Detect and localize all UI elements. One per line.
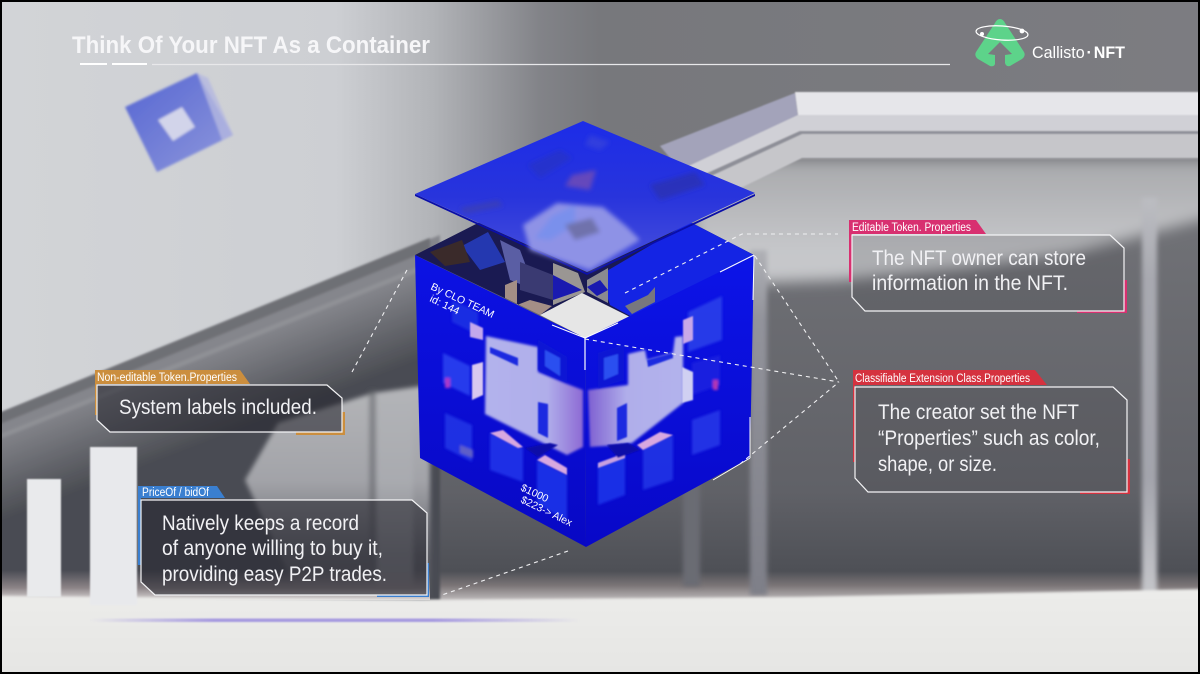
panel text: Natively keeps a record [162, 511, 359, 535]
corner accent [296, 412, 345, 435]
lid panel [415, 121, 755, 275]
white blocks [27, 447, 137, 605]
panel outline [852, 235, 1124, 311]
cube edges [552, 255, 754, 480]
ceiling underside [690, 160, 1200, 285]
glowing right window [588, 336, 683, 447]
corner accent [377, 563, 429, 597]
columns [683, 198, 1157, 598]
panel text: The creator set the NFT [878, 400, 1079, 424]
logo wordmark: Callisto·NFT [1032, 43, 1126, 62]
tab accent [849, 220, 986, 282]
corner accent [1077, 280, 1127, 313]
panel: price [138, 486, 429, 597]
panel outline [141, 500, 427, 595]
tab accent [138, 486, 225, 565]
tab accent [95, 370, 250, 415]
ceiling beam [660, 92, 1200, 200]
logo: Callisto NFT [975, 19, 1126, 66]
panel outline [855, 387, 1127, 492]
white inner square [540, 293, 630, 338]
panel: price: of anyone willing to buy it, [162, 536, 383, 560]
panel: editable: information in the NFT. [872, 271, 1068, 295]
panel text: System labels included. [119, 395, 317, 419]
inner cube blocks [443, 296, 722, 520]
cube illustration [415, 121, 755, 547]
dashed connector lines [352, 234, 839, 595]
window notches and highlights [470, 316, 693, 475]
floor glow [90, 618, 580, 622]
cube text top: id: 144 [428, 293, 461, 318]
panel: classifiable [853, 370, 1130, 494]
cube text top: By CLO TEAM [429, 281, 496, 321]
tab label: Classifiable Extension Class.Properties [855, 373, 1030, 385]
tab label: Editable Token. Properties [852, 222, 971, 234]
icon: green arrow [975, 19, 1025, 66]
tab label: PriceOf / bidOf [142, 487, 210, 499]
panel: editable [849, 220, 1127, 313]
front-right face [585, 255, 754, 547]
panel: non-editable [95, 370, 345, 435]
icon: orbit ring [976, 24, 1028, 42]
floor [0, 589, 1200, 674]
panel: classifiable: shape, or size. [878, 452, 997, 476]
panel: price: providing easy P2P trades. [162, 562, 387, 586]
corner accent [1080, 459, 1130, 494]
panel outline [97, 385, 342, 432]
title underline [80, 63, 950, 66]
front-left face [415, 255, 586, 547]
tab accent [853, 370, 1047, 462]
cube interior [415, 222, 754, 338]
panel text: The NFT owner can store [872, 246, 1086, 270]
tab label: Non-editable Token.Properties [97, 372, 237, 384]
cube text bottom: $223-> Alex [519, 494, 575, 529]
icon: floating blurred square [125, 73, 233, 172]
panel: classifiable: “Properties” such as color, [878, 426, 1100, 450]
cube text bottom: $1000 [519, 482, 550, 505]
glowing left window [485, 336, 583, 455]
title: Think Of Your NFT As a Container [72, 32, 430, 59]
